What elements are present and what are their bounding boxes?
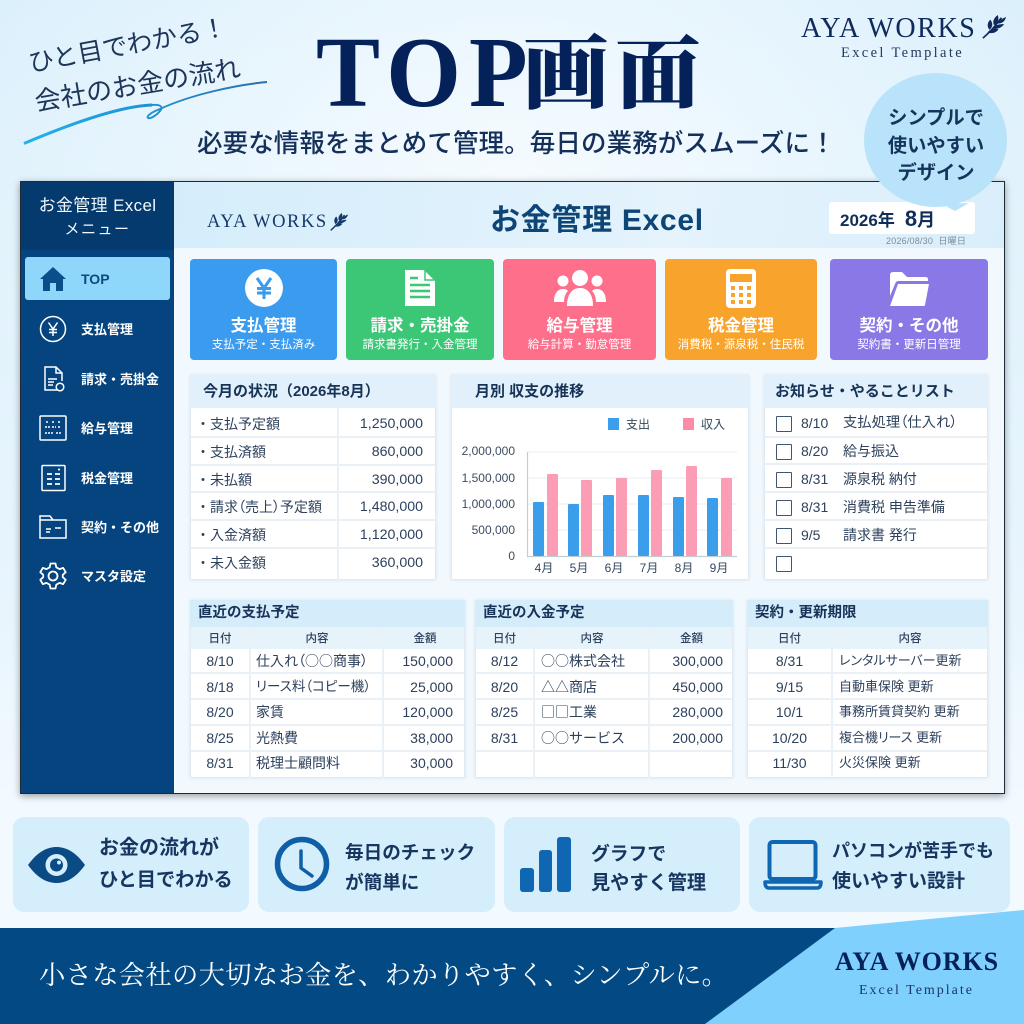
payment rows: 8/18 bbox=[206, 679, 234, 695]
column headers: 金額 bbox=[414, 633, 436, 645]
status rows: 1,480,000 bbox=[360, 499, 423, 515]
column headers: 日付 bbox=[778, 633, 801, 645]
menu item: contracts bbox=[39, 515, 159, 539]
icon: clock bbox=[274, 836, 330, 892]
status rows: ・ bbox=[196, 472, 210, 488]
x axis labels bbox=[535, 561, 728, 575]
menu item: payment bbox=[40, 316, 133, 342]
status rows: 請求（売上）予定額 bbox=[210, 499, 322, 515]
column headers: 日付 bbox=[208, 633, 232, 645]
panel heading: お知らせ・やることリスト bbox=[775, 383, 955, 400]
month: 2026年 8月 bbox=[840, 206, 935, 231]
payment rows: 家賃 bbox=[256, 704, 284, 720]
icon: bars bbox=[520, 837, 571, 892]
menu item: settings: マスタ設定 bbox=[81, 569, 146, 584]
handwritten tagline bbox=[26, 14, 243, 117]
to-do rows bbox=[765, 414, 987, 572]
receipt rows: △△商店 bbox=[541, 677, 597, 697]
to-do rows: 支払処理（仕入れ） bbox=[843, 415, 957, 431]
x axis labels: 5月 bbox=[570, 561, 588, 575]
feature card: graph: 見やすく管理 bbox=[591, 873, 706, 894]
status rows: 1,250,000 bbox=[360, 416, 423, 432]
payment rows: 30,000 bbox=[410, 755, 453, 771]
panel heading: 今月の状況（2026年8月） bbox=[203, 383, 380, 400]
receipt rows: 8/31 bbox=[491, 730, 518, 746]
sidebar header: お金管理 Excel bbox=[39, 196, 156, 215]
module card: tax bbox=[665, 259, 817, 360]
panel: this month status bbox=[190, 375, 436, 580]
payment rows: 仕入れ（○○商事） bbox=[256, 651, 368, 671]
menu item: contracts: 契約・その他 bbox=[81, 520, 159, 535]
card text: 契約・その他 bbox=[860, 317, 958, 335]
payment rows: 税理士顧問料 bbox=[256, 755, 340, 771]
column headers bbox=[476, 627, 732, 649]
x axis labels: 9月 bbox=[710, 561, 728, 575]
renewal rows: 事務所賃貸契約 更新 bbox=[839, 704, 960, 719]
renewal rows: 9/15 bbox=[776, 679, 803, 695]
y axis labels: 1,000,000 bbox=[462, 497, 515, 511]
callout text bbox=[888, 107, 984, 184]
renewal rows: レンタルサーバー更新 bbox=[839, 653, 962, 668]
y axis labels: 2,000,000 bbox=[462, 444, 515, 458]
panel heading bbox=[451, 375, 749, 408]
x axis labels: 8月 bbox=[675, 561, 693, 575]
to-do rows: 8/31 bbox=[801, 499, 828, 515]
table heading: 契約・更新期限 bbox=[755, 605, 856, 621]
payment rows: 25,000 bbox=[410, 679, 453, 695]
receipt rows: 8/12 bbox=[491, 653, 518, 669]
feature card: clock: が簡単に bbox=[345, 872, 419, 893]
footer subtitle: Excel Template bbox=[859, 983, 974, 998]
feature card: laptop bbox=[749, 817, 1010, 912]
column headers: 内容 bbox=[580, 633, 604, 645]
module card: contracts bbox=[830, 259, 988, 360]
callout text: 使いやすい bbox=[888, 136, 984, 156]
footer tagline: 小さな会社の大切なお金を、わかりやすく、シンプルに。 bbox=[39, 954, 728, 992]
status rows: 360,000 bbox=[372, 555, 423, 571]
icon: folder bbox=[890, 272, 929, 306]
receipt rows: 200,000 bbox=[672, 730, 723, 746]
table: upcoming payments bbox=[190, 600, 465, 778]
to-do rows: 消費税 申告準備 bbox=[843, 499, 945, 515]
module card: payroll bbox=[503, 259, 656, 360]
expense bars bbox=[533, 495, 718, 556]
y axis labels bbox=[462, 444, 515, 563]
income bars bbox=[547, 466, 732, 556]
menu label: TOP bbox=[81, 271, 110, 287]
icon: laptop bbox=[763, 840, 823, 890]
header logo bbox=[207, 212, 348, 232]
menu item: payroll bbox=[39, 415, 133, 441]
y axis labels: 500,000 bbox=[472, 523, 515, 537]
receipt rows: ○○サービス bbox=[541, 728, 625, 748]
icon: people bbox=[554, 270, 606, 306]
status rows: 未入金額 bbox=[210, 555, 266, 571]
module card: payroll: 給与計算・勤怠管理 bbox=[528, 339, 631, 351]
feature text: グラフで bbox=[591, 843, 666, 864]
menu item: invoices bbox=[44, 366, 159, 392]
status rows: ・ bbox=[196, 416, 210, 432]
status rows: 支払済額 bbox=[210, 444, 266, 460]
column headers: 金額 bbox=[680, 633, 703, 645]
bar chart bbox=[462, 418, 737, 575]
table: upcoming receipts bbox=[475, 600, 733, 778]
payment rows bbox=[191, 651, 464, 771]
icon: home bbox=[40, 267, 66, 291]
module card: payments bbox=[190, 259, 337, 360]
to-do rows: 9/5 bbox=[801, 527, 820, 543]
receipt rows: 300,000 bbox=[672, 653, 723, 669]
panel: to-do list bbox=[764, 375, 988, 580]
feature card: clock bbox=[258, 817, 495, 912]
renewal rows: 自動車保険 更新 bbox=[839, 679, 934, 694]
payment rows: 8/10 bbox=[206, 653, 234, 669]
table: contract renewals bbox=[747, 600, 988, 778]
panel heading bbox=[190, 375, 436, 408]
renewal rows: 10/20 bbox=[772, 730, 807, 746]
menu item: invoices: 請求・売掛金 bbox=[81, 372, 159, 387]
feature text: お金の流れが bbox=[99, 837, 219, 859]
status rows: 390,000 bbox=[372, 472, 423, 488]
renewal rows: 火災保険 更新 bbox=[839, 755, 921, 770]
module card: tax: 消費税・源泉税・住民税 bbox=[678, 339, 804, 351]
column headers bbox=[748, 627, 987, 649]
legend: 収入 bbox=[701, 418, 725, 432]
column headers: 内容 bbox=[306, 633, 328, 645]
callout text: デザイン bbox=[897, 163, 975, 184]
tagline line 2: 会社のお金の流れ bbox=[33, 53, 243, 117]
to-do rows: 源泉税 納付 bbox=[843, 471, 917, 487]
card text: 支払管理 bbox=[230, 317, 296, 335]
card text: 税金管理 bbox=[708, 317, 774, 335]
payment rows: 8/20 bbox=[206, 704, 234, 720]
feature card: eye bbox=[13, 817, 249, 912]
y axis labels: 0 bbox=[508, 549, 515, 563]
tagline line 1: ひと目でわかる！ bbox=[26, 14, 229, 78]
feature text: パソコンが苦手でも bbox=[832, 841, 994, 861]
logo wordmark: AYA WORKS bbox=[801, 13, 976, 44]
callout text: シンプルで bbox=[888, 108, 984, 129]
sidebar bbox=[21, 182, 174, 793]
status rows: 未払額 bbox=[210, 472, 252, 488]
renewal rows bbox=[748, 653, 987, 771]
receipt rows: ○○株式会社 bbox=[541, 651, 625, 671]
x axis labels: 4月 bbox=[535, 561, 553, 575]
footer band bbox=[0, 928, 1024, 1024]
payment rows: リース料（コピー機） bbox=[256, 679, 371, 694]
module card: payments: 支払予定・支払済み bbox=[212, 339, 315, 351]
title latin: TOP bbox=[316, 15, 536, 128]
payment rows: 8/25 bbox=[206, 730, 234, 746]
x axis labels: 7月 bbox=[640, 561, 658, 575]
legend: 支出 bbox=[626, 418, 650, 432]
module card: invoices: 請求書発行・入金管理 bbox=[362, 339, 478, 351]
receipt rows: 280,000 bbox=[672, 704, 723, 720]
card text: 請求・売掛金 bbox=[370, 317, 470, 335]
menu item: settings bbox=[39, 562, 146, 590]
active menu item: TOP bbox=[25, 257, 170, 300]
icon: eye bbox=[28, 847, 85, 883]
title kanji: 画面 bbox=[523, 10, 707, 125]
panel heading bbox=[764, 375, 988, 408]
to-do rows: 8/20 bbox=[801, 443, 828, 459]
to-do rows: 8/10 bbox=[801, 415, 828, 431]
receipt rows bbox=[476, 651, 732, 752]
icon: laurel leaf bbox=[982, 15, 1006, 39]
renewal rows: 複合機リース 更新 bbox=[839, 730, 942, 745]
card text: 給与管理 bbox=[546, 317, 612, 335]
title bbox=[316, 10, 707, 128]
panel: monthly chart bbox=[451, 375, 749, 580]
logo wordmark small: AYA WORKS bbox=[207, 212, 328, 232]
current date: 2026/08/30 日曜日 bbox=[886, 236, 966, 246]
sidebar header: メニュー bbox=[64, 221, 130, 238]
feature card: graph bbox=[504, 817, 740, 912]
renewal rows: 10/1 bbox=[776, 704, 803, 720]
feature text: 毎日のチェック bbox=[345, 842, 475, 863]
renewal rows: 8/31 bbox=[776, 653, 803, 669]
receipt rows: 8/25 bbox=[491, 704, 518, 720]
status rows: ・ bbox=[196, 527, 210, 543]
dashboard title: お金管理 Excel bbox=[490, 204, 704, 237]
x axis labels: 6月 bbox=[605, 561, 623, 575]
icon: calculator bbox=[726, 269, 756, 308]
icon: yen coin bbox=[245, 269, 283, 307]
table heading bbox=[747, 600, 988, 627]
table heading bbox=[190, 600, 465, 627]
column headers bbox=[191, 627, 464, 649]
icon: document bbox=[405, 270, 435, 306]
panel heading: 月別 収支の推移 bbox=[475, 383, 584, 400]
status rows: 支払予定額 bbox=[210, 416, 280, 432]
status rows: ・ bbox=[196, 444, 210, 460]
table heading: 直近の入金予定 bbox=[483, 605, 584, 621]
y axis labels: 1,500,000 bbox=[462, 471, 515, 485]
module card: invoices bbox=[346, 259, 494, 360]
receipt rows: □□工業 bbox=[541, 702, 597, 722]
status rows: 入金済額 bbox=[210, 527, 266, 543]
status rows: ・ bbox=[196, 555, 210, 571]
status rows bbox=[191, 416, 435, 571]
receipt rows: 8/20 bbox=[491, 679, 518, 695]
column headers: 日付 bbox=[493, 633, 516, 645]
status rows: 1,120,000 bbox=[360, 527, 423, 543]
legend bbox=[608, 418, 725, 432]
payment rows: 8/31 bbox=[206, 755, 234, 771]
status rows: ・ bbox=[196, 499, 210, 515]
sidebar header bbox=[21, 182, 174, 250]
footer accent panel bbox=[705, 910, 1024, 1024]
footer wordmark: AYA WORKS bbox=[835, 947, 999, 976]
icon: small leaf bbox=[330, 213, 348, 231]
feature card: laptop: 使いやすい設計 bbox=[832, 871, 965, 892]
logo subtitle: Excel Template bbox=[841, 45, 964, 61]
feature card: eye: ひと目でわかる bbox=[99, 870, 233, 891]
brand logo bbox=[801, 13, 1006, 61]
payment rows: 120,000 bbox=[402, 704, 453, 720]
footer logo bbox=[835, 947, 999, 998]
table heading: 直近の支払予定 bbox=[198, 605, 300, 621]
module card: contracts: 契約書・更新日管理 bbox=[857, 339, 961, 351]
brush swoosh underline bbox=[24, 81, 268, 145]
to-do rows: 8/31 bbox=[801, 471, 828, 487]
header band bbox=[174, 182, 1004, 248]
subtitle: 必要な情報をまとめて管理。毎日の業務がスムーズに！ bbox=[197, 129, 836, 158]
to-do rows: 請求書 発行 bbox=[843, 527, 917, 543]
dashboard window bbox=[20, 181, 1005, 794]
payment rows: 光熱費 bbox=[256, 730, 298, 746]
column headers: 内容 bbox=[898, 633, 922, 645]
date box bbox=[829, 202, 975, 234]
table heading bbox=[475, 600, 733, 627]
to-do rows: 給与振込 bbox=[843, 443, 899, 459]
status rows: 860,000 bbox=[372, 444, 423, 460]
menu item: tax bbox=[41, 464, 133, 492]
callout bubble bbox=[864, 73, 1007, 211]
menu item: payment: 支払管理 bbox=[81, 322, 133, 337]
payment rows: 150,000 bbox=[402, 653, 453, 669]
renewal rows: 11/30 bbox=[772, 755, 806, 771]
menu item: payroll: 給与管理 bbox=[81, 421, 133, 436]
menu item: tax: 税金管理 bbox=[81, 471, 133, 486]
payment rows: 38,000 bbox=[410, 730, 453, 746]
receipt rows: 450,000 bbox=[672, 679, 723, 695]
